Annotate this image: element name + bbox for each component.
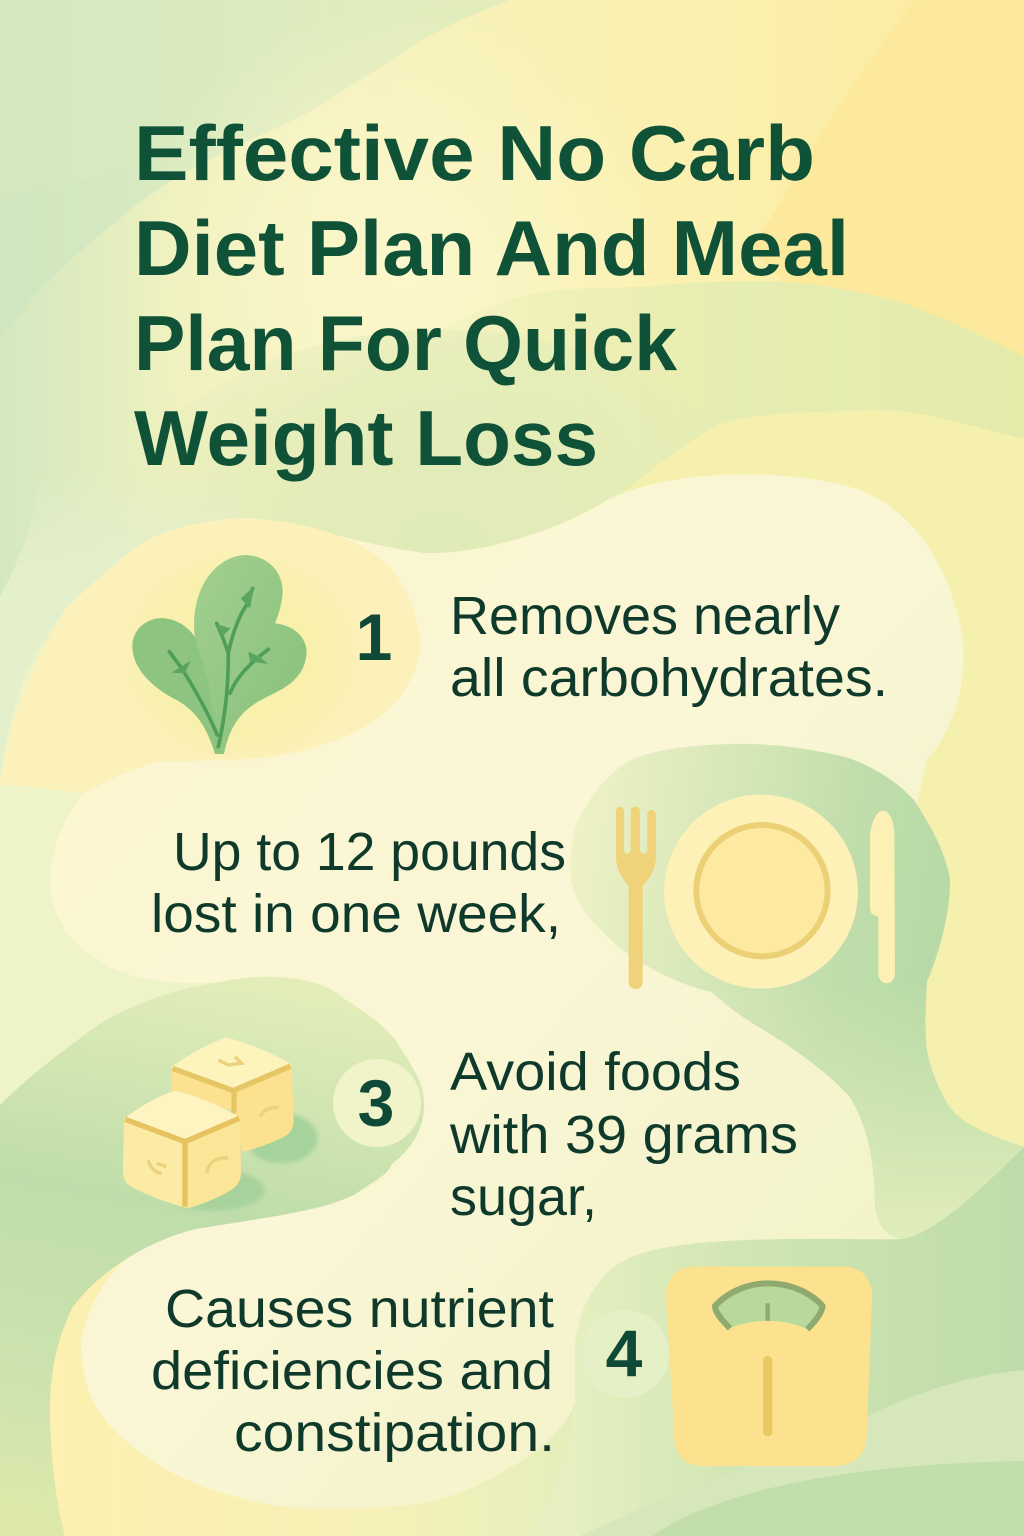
item 2 text: Up to 12 pounds (173, 822, 566, 882)
plate (664, 795, 858, 989)
number 3 (333, 1059, 421, 1147)
item 2 text (151, 822, 566, 944)
item 2: plate icon (616, 795, 895, 989)
number 4: 4 (606, 1316, 643, 1390)
cube marks (148, 1057, 278, 1173)
item 4 text: constipation. (234, 1403, 555, 1463)
number 3: 3 (358, 1066, 394, 1140)
left green wave (0, 977, 420, 1536)
item 3 text: with 39 grams (449, 1105, 798, 1165)
item 4 text: deficiencies and (151, 1341, 553, 1401)
item 3 text: Avoid foods (450, 1042, 741, 1102)
front cube (124, 1119, 185, 1207)
title: Effective No Carb (134, 109, 815, 197)
bottom right green (530, 1147, 1024, 1536)
title (134, 109, 849, 482)
plate blob (570, 744, 1024, 1239)
number 4 (581, 1310, 669, 1398)
fork (616, 807, 656, 989)
yellow lobe behind leaf (0, 518, 420, 793)
main cream wave (50, 474, 964, 1509)
title: Diet Plan And Meal (134, 204, 849, 292)
item 3 text: sugar, (450, 1167, 597, 1227)
item 1 text: Removes nearly (450, 586, 840, 646)
item 4: bathroom scale icon (666, 1267, 872, 1466)
item 3: butter cubes icon (124, 1038, 318, 1211)
back cube (173, 1067, 293, 1151)
item 3 text (449, 1042, 798, 1227)
title: Weight Loss (134, 394, 598, 482)
item 2 text: lost in one week, (151, 884, 561, 944)
item 1 text (450, 586, 888, 708)
item 1: leafy greens icon (132, 555, 307, 754)
item 4 text: Causes nutrient (165, 1279, 554, 1339)
item 1 text: all carbohydrates. (450, 648, 888, 708)
title: Plan For Quick (134, 299, 678, 387)
item 4 text (151, 1279, 555, 1463)
knife (870, 811, 895, 983)
bottom lobe yellow (50, 1229, 600, 1536)
green blob behind cubes (0, 977, 424, 1308)
number 1: 1 (356, 600, 392, 674)
